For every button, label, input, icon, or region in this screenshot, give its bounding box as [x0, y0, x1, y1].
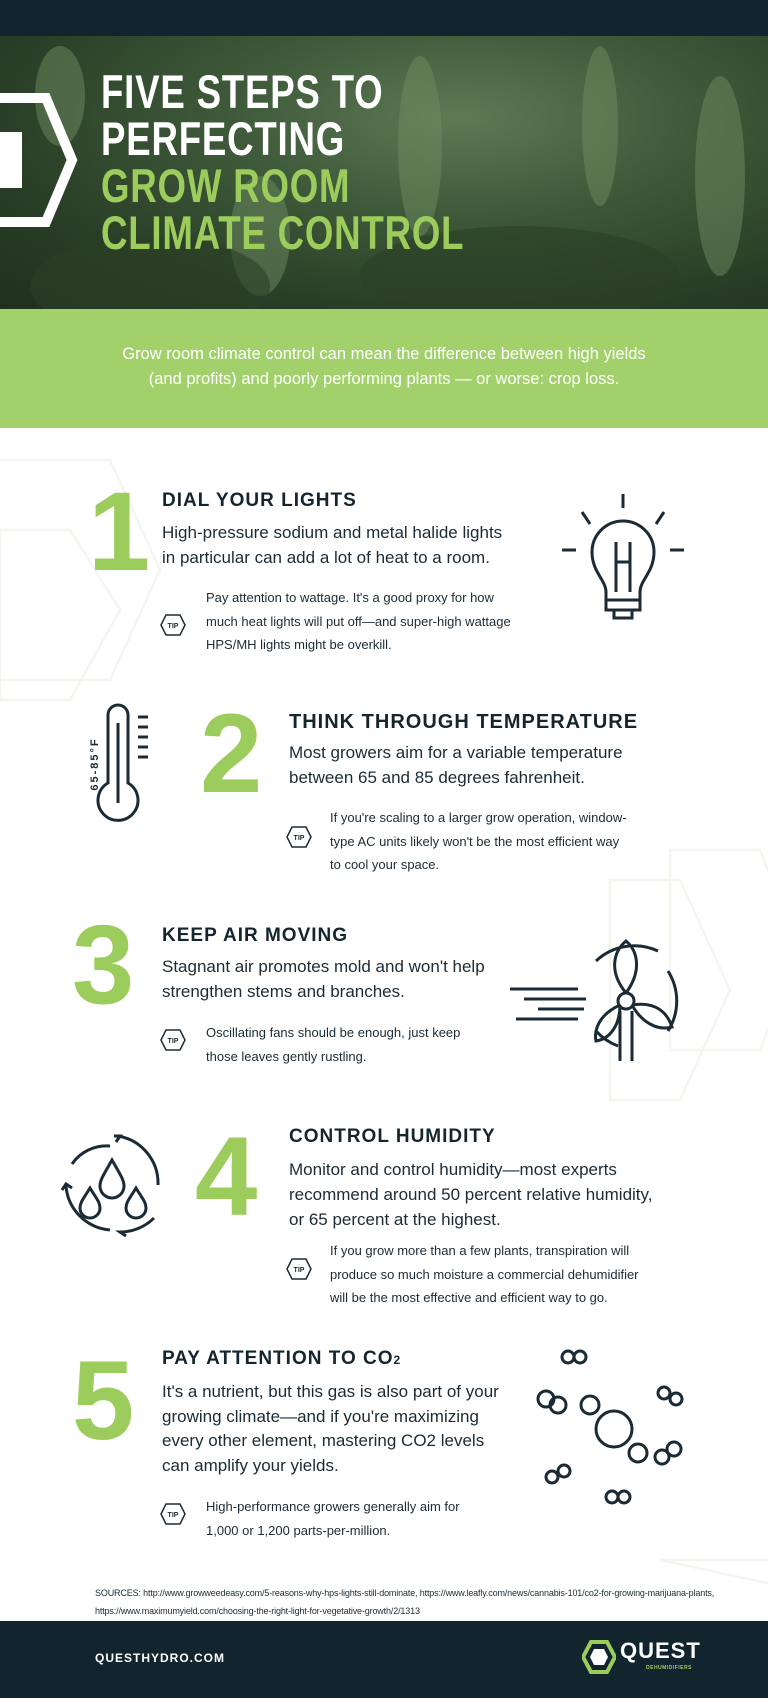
title: GROW ROOM [101, 159, 350, 212]
tip icon 2 [286, 826, 312, 848]
footer logo [582, 1638, 701, 1674]
intro text: Grow room climate control can mean the difference between high yields [122, 345, 646, 363]
footer [0, 1621, 768, 1698]
tip icon 3 [160, 1029, 186, 1051]
body 2: Most growers aim for a variable temperature [289, 743, 623, 762]
intro text: (and profits) and poorly performing plants — or worse: crop loss. [149, 370, 619, 388]
sources [95, 1588, 714, 1616]
sources: SOURCES: http://www.growweedeasy.com/5-reasons-why-hps-lights-still-dominate, https://www.leafly.com/news/cannabis-101/co2-for-growing-marijuana-plants, [95, 1588, 714, 1598]
step 1 [88, 469, 684, 652]
intro band [0, 309, 768, 428]
intro text [122, 345, 646, 388]
top bar [0, 0, 768, 36]
hero hexagon logo mark [0, 93, 78, 227]
body 5: can amplify your yields. [162, 1456, 339, 1474]
title: CLIMATE CONTROL [101, 206, 464, 259]
body 2: between 65 and 85 degrees fahrenheit. [289, 768, 585, 786]
number 1: 1 [88, 469, 150, 594]
tip icon 1 [160, 614, 186, 636]
icon: humidity cycle [60, 1134, 160, 1238]
body 4: or 65 percent at the highest. [289, 1210, 501, 1229]
tip text 3 [206, 1025, 460, 1064]
body 5: growing climate—and if you're maximizing [162, 1406, 479, 1426]
number 3: 3 [72, 902, 134, 1027]
tip icon 2: TIP [294, 835, 305, 842]
title [101, 65, 464, 259]
step 4 [60, 1114, 652, 1305]
tip icon 5: TIP [168, 1512, 179, 1519]
step 5 [72, 1338, 684, 1538]
tip text 2: to cool your space. [330, 857, 439, 872]
sources: https://www.maximumyield.com/choosing-the-right-light-for-vegetative-growth/2/1313 [95, 1606, 420, 1616]
label 65-85F: 65-85°F [89, 737, 101, 791]
tip icon 4: TIP [294, 1267, 305, 1274]
tip text 1: HPS/MH lights might be overkill. [206, 637, 392, 652]
tip icon 4 [286, 1258, 312, 1280]
body 5: It's a nutrient, but this gas is also part of your [162, 1382, 499, 1401]
tip text 2: type AC units likely won't be the most efficient way [330, 834, 619, 848]
heading 5: PAY ATTENTION TO CO2 [162, 1348, 400, 1369]
heading 1: DIAL YOUR LIGHTS [162, 490, 357, 511]
tip text 5: High-performance growers generally aim for [206, 1499, 460, 1514]
body 3 [162, 957, 485, 1000]
tip text 4: will be the most effective and efficient way to go. [330, 1290, 608, 1305]
footer logo: DEHUMIDIFIERS [646, 1665, 692, 1671]
body 4 [289, 1160, 652, 1229]
tip icon 5 [160, 1503, 186, 1525]
body 1: High-pressure sodium and metal halide lights [162, 523, 502, 542]
heading 4: CONTROL HUMIDITY [289, 1126, 496, 1147]
tip text 4 [330, 1243, 639, 1305]
number 2: 2 [200, 691, 262, 816]
body 4: recommend around 50 percent relative humidity, [289, 1185, 652, 1204]
tip text 5: 1,000 or 1,200 parts-per-million. [206, 1522, 390, 1538]
icon: thermometer [96, 704, 148, 822]
body 4: Monitor and control humidity—most experts [289, 1160, 617, 1179]
heading 3: KEEP AIR MOVING [162, 925, 348, 946]
body 5: every other element, mastering CO2 levels [162, 1431, 484, 1450]
body 1: in particular can add a lot of heat to a room. [162, 548, 490, 566]
body 2 [289, 743, 623, 786]
footer url: QUESTHYDRO.COM [95, 1651, 225, 1665]
body 3: Stagnant air promotes mold and won't help [162, 957, 485, 976]
body 3: strengthen stems and branches. [162, 982, 405, 1000]
footer logo: QUEST [620, 1638, 701, 1663]
tip text 1: Pay attention to wattage. It's a good proxy for how [206, 590, 494, 605]
tip icon 3: TIP [168, 1038, 179, 1045]
icon: light bulb [562, 494, 684, 620]
hero photo background [0, 36, 768, 309]
body 5 [162, 1382, 499, 1474]
number 5: 5 [72, 1338, 134, 1463]
tip text 1: much heat lights will put off—and super-high wattage [206, 614, 511, 628]
title: PERFECTING [101, 112, 345, 165]
tip text 3: those leaves gently rustling. [206, 1048, 366, 1064]
icon: fan [510, 939, 678, 1061]
step 2 [89, 691, 638, 872]
heading 2: THINK THROUGH TEMPERATURE [289, 711, 638, 733]
background hexagons [0, 458, 768, 1584]
tip text 4: If you grow more than a few plants, transpiration will [330, 1243, 629, 1258]
step 3 [72, 902, 678, 1064]
title: FIVE STEPS TO [101, 65, 383, 118]
tip text 1 [206, 590, 511, 652]
body 1 [162, 523, 502, 566]
icon: molecules [536, 1350, 684, 1504]
tip text 3: Oscillating fans should be enough, just keep [206, 1025, 460, 1040]
number 4: 4 [195, 1114, 257, 1239]
tip text 5 [206, 1499, 460, 1538]
tip text 4: produce so much moisture a commercial dehumidifier [330, 1266, 639, 1282]
tip text 2: If you're scaling to a larger grow operation, window- [330, 810, 627, 825]
tip text 2 [330, 810, 627, 872]
tip icon 1: TIP [168, 623, 179, 630]
